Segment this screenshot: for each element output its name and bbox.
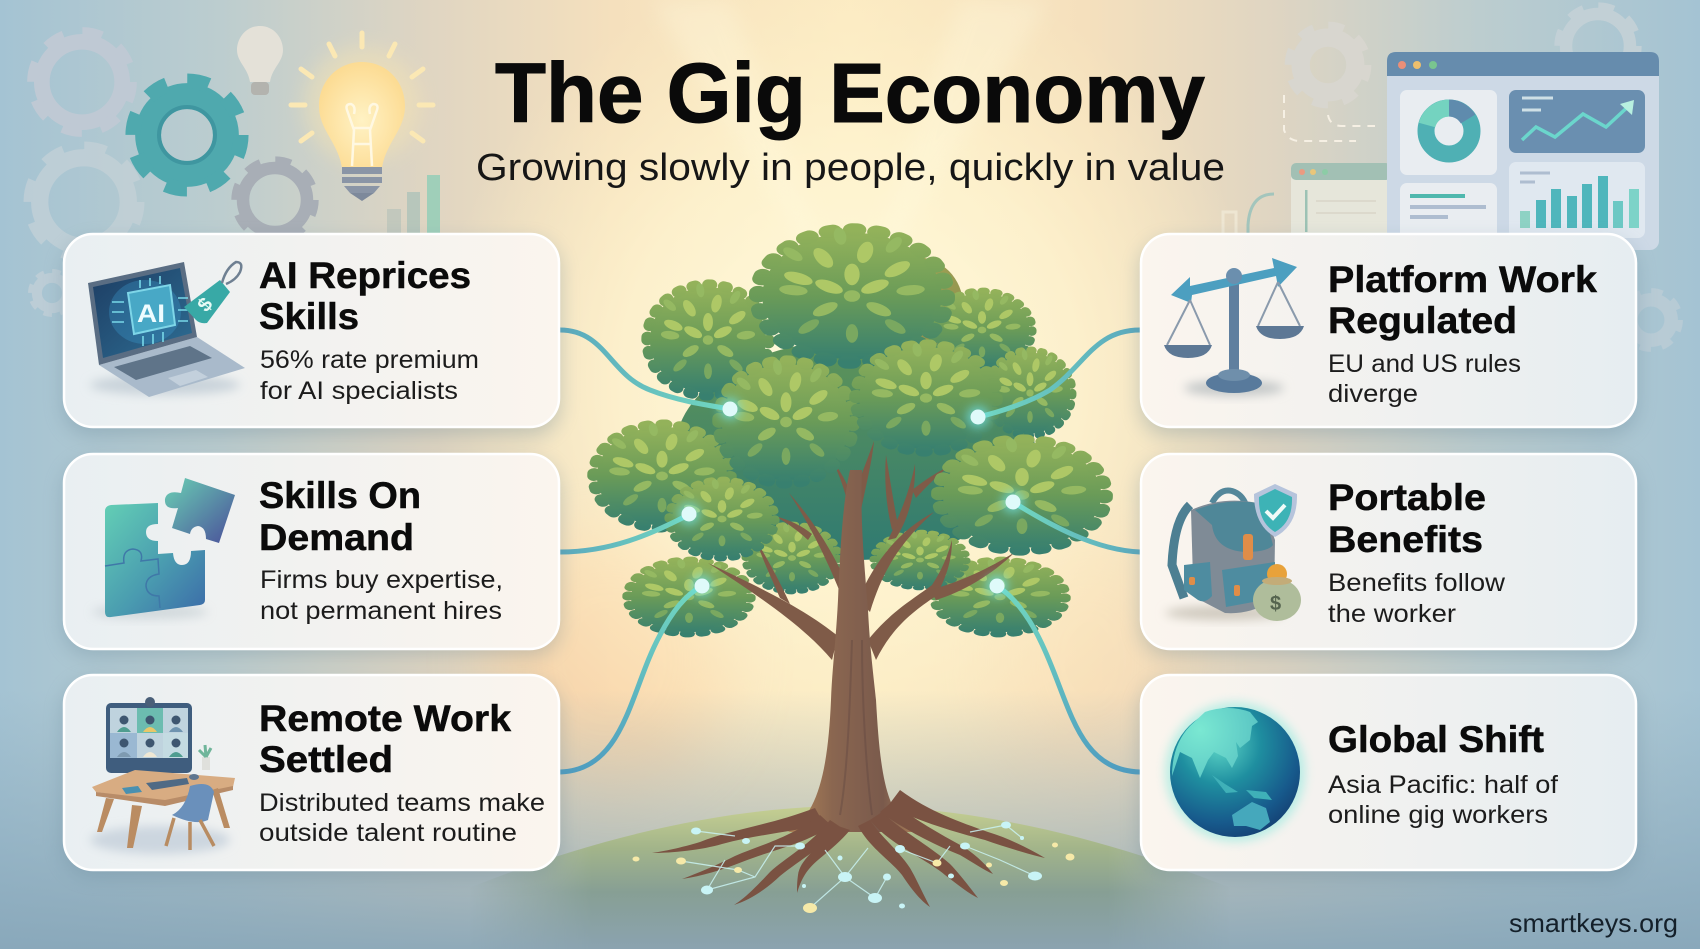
body text: Asia Pacific: half of	[1328, 771, 1558, 799]
icon: backpack, shield and money pot	[1165, 484, 1301, 621]
icon: puzzle pieces	[92, 478, 235, 619]
connector nodes	[678, 398, 1024, 597]
icon: video call at desk	[90, 697, 235, 854]
panel: AI Reprices Skills: Skills	[259, 296, 359, 337]
panel: Platform Work Regulated: diverge	[1328, 380, 1418, 408]
icon: small window	[1291, 163, 1391, 239]
heading: AI Reprices	[259, 255, 471, 296]
body text: Benefits follow	[1328, 569, 1506, 597]
foliage: back clusters	[628, 257, 1064, 634]
icon: small bars	[387, 175, 440, 239]
foliage: front clusters	[594, 227, 1105, 558]
icon: laptop with AI chip and price tag: AI	[137, 300, 165, 328]
heading: Global Shift	[1328, 719, 1544, 760]
roots	[652, 790, 1045, 907]
panel: Portable Benefits	[1140, 454, 1637, 656]
root network	[632, 822, 1074, 913]
panel: Remote Work Settled: outside talent routine	[259, 819, 517, 847]
icon: balance scale	[1164, 258, 1304, 396]
connector: AI Reprices to tree	[560, 330, 730, 409]
icon: grey gear	[236, 161, 314, 239]
ground hill	[492, 807, 1208, 949]
heading: Skills On	[259, 475, 421, 516]
panel: AI Reprices Skills: for AI specialists	[260, 377, 458, 405]
connector: Portable Benefits to tree	[1013, 502, 1140, 552]
body text: Firms buy expertise,	[260, 566, 503, 594]
icon: globe	[1165, 702, 1305, 842]
panel: Skills On Demand: not permanent hires	[260, 597, 502, 625]
body text: EU and US rules	[1328, 350, 1521, 378]
icon: faint large gear	[30, 148, 138, 256]
bar chart panel	[1509, 162, 1645, 238]
panel: Platform Work Regulated	[1140, 234, 1637, 436]
decoration: gears, bulbs and bars top left	[30, 26, 440, 314]
icon: backpack, shield and money pot: $	[1270, 593, 1281, 615]
panel: AI Reprices Skills	[63, 234, 560, 436]
connector: Platform Work Regulated to tree	[978, 330, 1140, 417]
panel: Global Shift: online gig workers	[1328, 801, 1548, 829]
heading: Remote Work	[259, 698, 511, 739]
panel: Portable Benefits: Benefits	[1328, 519, 1483, 560]
connector: Global Shift to tree	[997, 586, 1140, 772]
panel: Global Shift	[1140, 675, 1637, 876]
panel: Remote Work Settled: Settled	[259, 739, 393, 780]
heading: Platform Work	[1328, 259, 1597, 300]
title: The Gig Economy	[495, 46, 1205, 140]
connector: Skills On Demand to tree	[560, 514, 690, 552]
panel: Remote Work Settled	[63, 675, 560, 876]
icon: glowing light bulb	[291, 33, 433, 201]
donut chart panel	[1400, 90, 1497, 175]
icon: pale gear	[1290, 27, 1366, 103]
panel: Platform Work Regulated: Regulated	[1328, 300, 1517, 341]
footer: source: smartkeys.org	[1509, 908, 1678, 938]
icon: faint side gear	[1623, 292, 1679, 348]
body text: Distributed teams make	[259, 789, 545, 817]
icon: faint small gear	[31, 272, 73, 314]
icon: laptop with AI chip and price tag: $	[193, 294, 217, 316]
body text: 56% rate premium	[260, 346, 479, 374]
icon: pale gear	[33, 33, 131, 131]
icon: faint gear	[1559, 7, 1637, 85]
subtitle: Growing slowly in people, quickly in value	[476, 147, 1225, 189]
decoration: dashboard and gears top right	[1223, 7, 1679, 348]
dashboard window	[1387, 52, 1659, 250]
text panel	[1400, 183, 1497, 243]
icon: laptop with AI chip and price tag	[88, 262, 245, 397]
panel: Skills On Demand: Demand	[259, 517, 414, 558]
heading: Portable	[1328, 477, 1486, 518]
tree	[594, 227, 1105, 907]
trunk and branches	[708, 441, 1015, 832]
icon: teal gear	[133, 81, 241, 189]
line chart panel	[1509, 90, 1645, 153]
panel: Portable Benefits: the worker	[1328, 600, 1456, 628]
icon: faded light bulb	[237, 26, 283, 95]
connector: Remote Work Settled to tree	[560, 586, 702, 772]
panel: Skills On Demand	[63, 454, 560, 656]
